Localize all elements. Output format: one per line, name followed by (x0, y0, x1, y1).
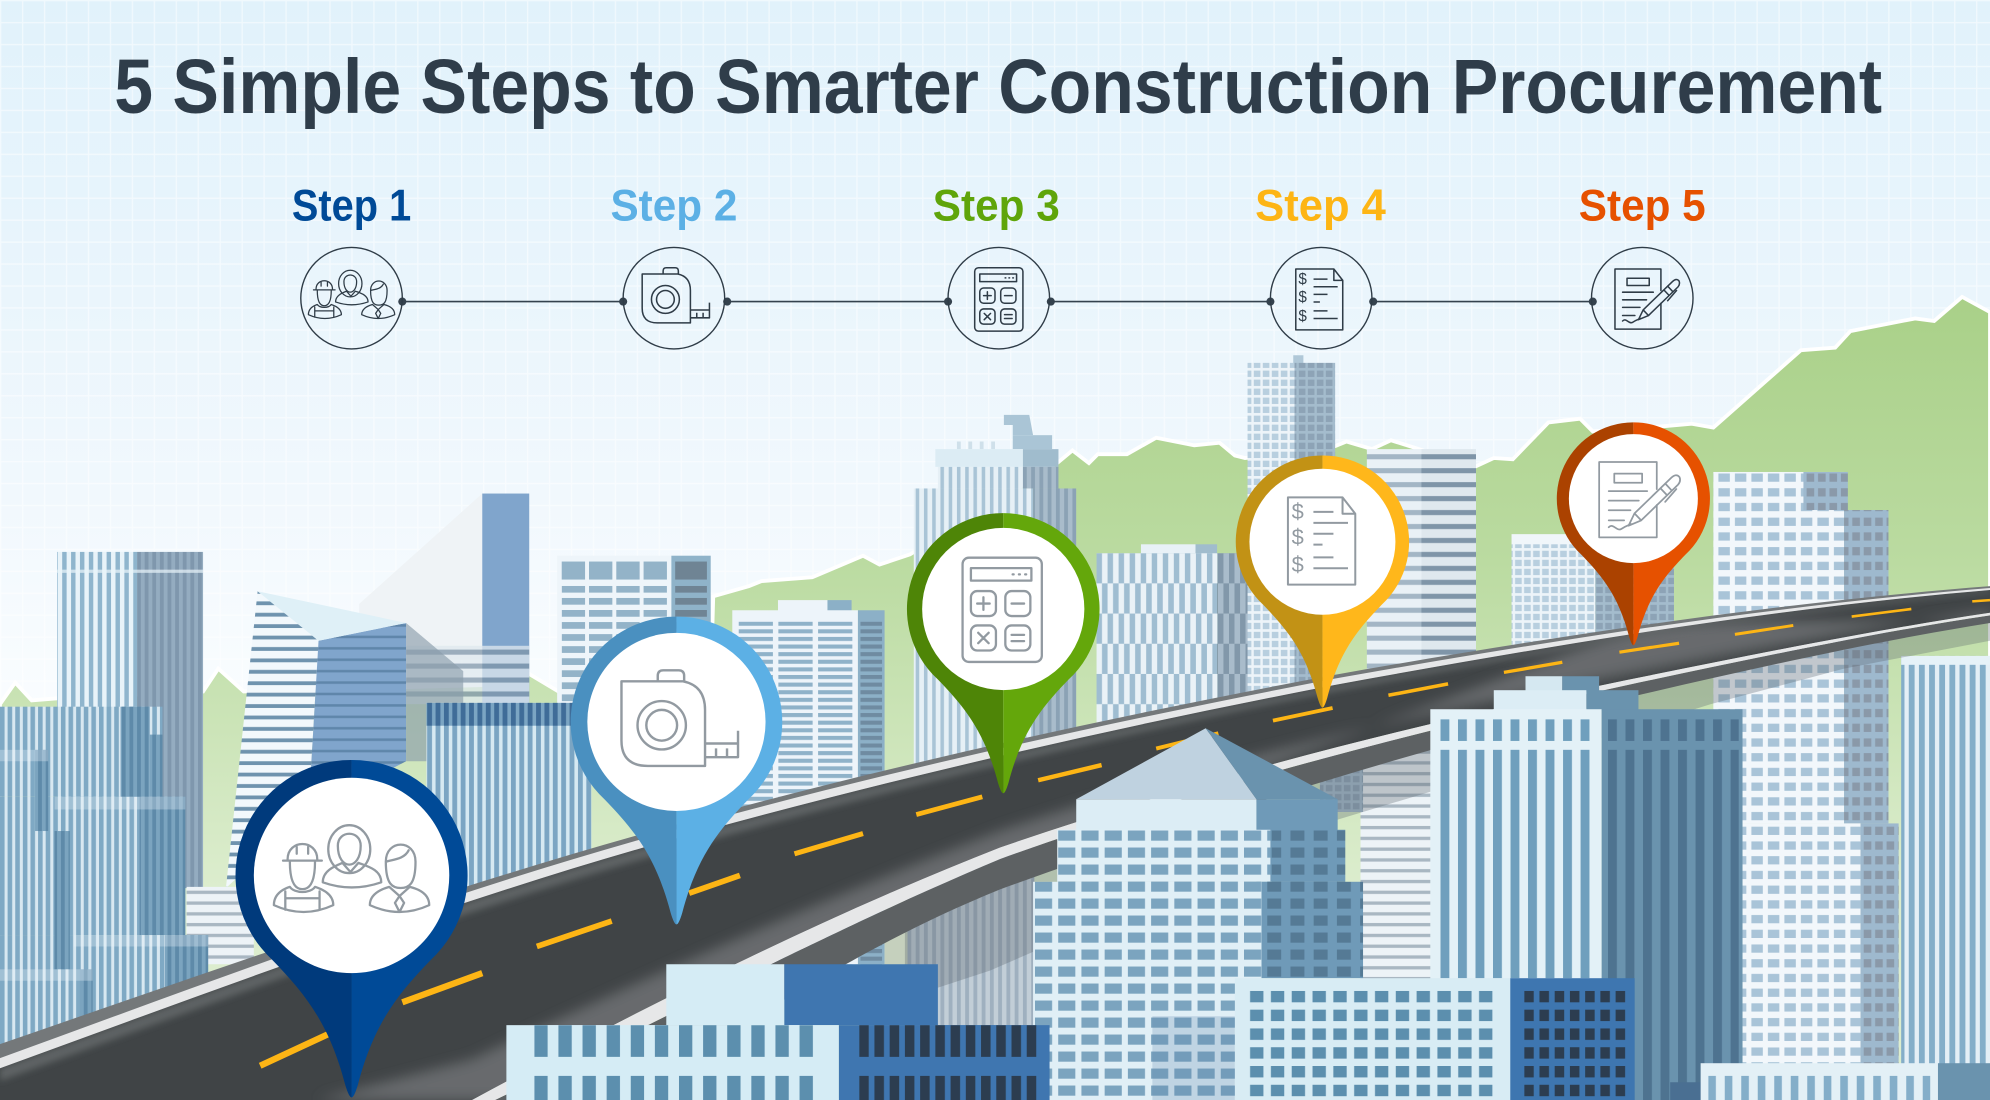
pin icon: signed contract (1599, 462, 1680, 537)
pin step 4 (1236, 456, 1409, 708)
pin icon: team (274, 825, 429, 912)
asphalt shading (0, 590, 1990, 1100)
asphalt (0, 590, 1990, 1100)
highway (0, 586, 1990, 1100)
road underside (495, 615, 1990, 1100)
pin step 1 (236, 760, 468, 1097)
bottom right low block (1701, 1063, 1990, 1100)
grid block centre right (1512, 534, 1674, 672)
ribbon-window building (732, 600, 885, 964)
pyramid-roof tower (1033, 728, 1363, 1100)
top white edge line (0, 588, 1990, 1068)
step 2 icon (623, 247, 725, 349)
step 1 icon (301, 247, 402, 349)
connector line (402, 301, 1593, 303)
road surface edge (0, 586, 1990, 1100)
checker building (1097, 544, 1270, 724)
pin icon: priced document: $ (1292, 525, 1304, 550)
far-right striped tower (1901, 656, 1990, 1100)
pin icon: calculator (963, 558, 1042, 662)
tall grid tower (1248, 355, 1335, 693)
pin icon: tape measure (621, 670, 738, 766)
window block left of centre (557, 556, 711, 721)
yellow centre dashes (260, 600, 1990, 1066)
green hills (0, 297, 1990, 1100)
step 5 icon (1591, 247, 1693, 349)
step 4 icon: $ (1298, 308, 1307, 325)
connector dots (398, 298, 1597, 306)
foreground skyline (506, 676, 1990, 1100)
pin step 3 (907, 513, 1100, 793)
pin step 2 (571, 617, 782, 924)
right tall white tower (1713, 472, 1899, 1100)
background skyline (0, 355, 1990, 1100)
pin step 5 (1557, 422, 1710, 645)
step 5 label: Step 5 (1579, 182, 1706, 231)
stepped tower behind step 3 (914, 415, 1076, 774)
pin icon: priced document: $ (1292, 552, 1304, 577)
step timeline (292, 182, 1706, 349)
pin icon: priced document: $ (1292, 499, 1304, 524)
bottom centre low block (506, 964, 1050, 1100)
under-road structures (885, 755, 1363, 1028)
sail tower: tall blue column (359, 494, 529, 704)
pin icon: priced document (1288, 497, 1355, 585)
step 4 icon: $ (1298, 289, 1307, 306)
horizontal-stripe tower (1361, 449, 1476, 981)
tall stepped tower (1430, 676, 1743, 1100)
step 4 label: Step 4 (1255, 182, 1386, 231)
left tall tower (57, 552, 203, 888)
step 3 icon (948, 247, 1050, 349)
road shadow (905, 615, 1990, 999)
step 1 label: Step 1 (292, 182, 411, 231)
step 4 icon: $ (1298, 271, 1307, 288)
bottom white edge line (472, 613, 1990, 1100)
step 2 label: Step 2 (610, 182, 737, 231)
striped low building (426, 703, 591, 893)
step 3 label: Step 3 (933, 182, 1060, 231)
low window block (1235, 978, 1635, 1100)
far-left front stack (0, 707, 208, 1062)
sail tower (187, 591, 463, 964)
step 4 icon (1270, 247, 1372, 349)
